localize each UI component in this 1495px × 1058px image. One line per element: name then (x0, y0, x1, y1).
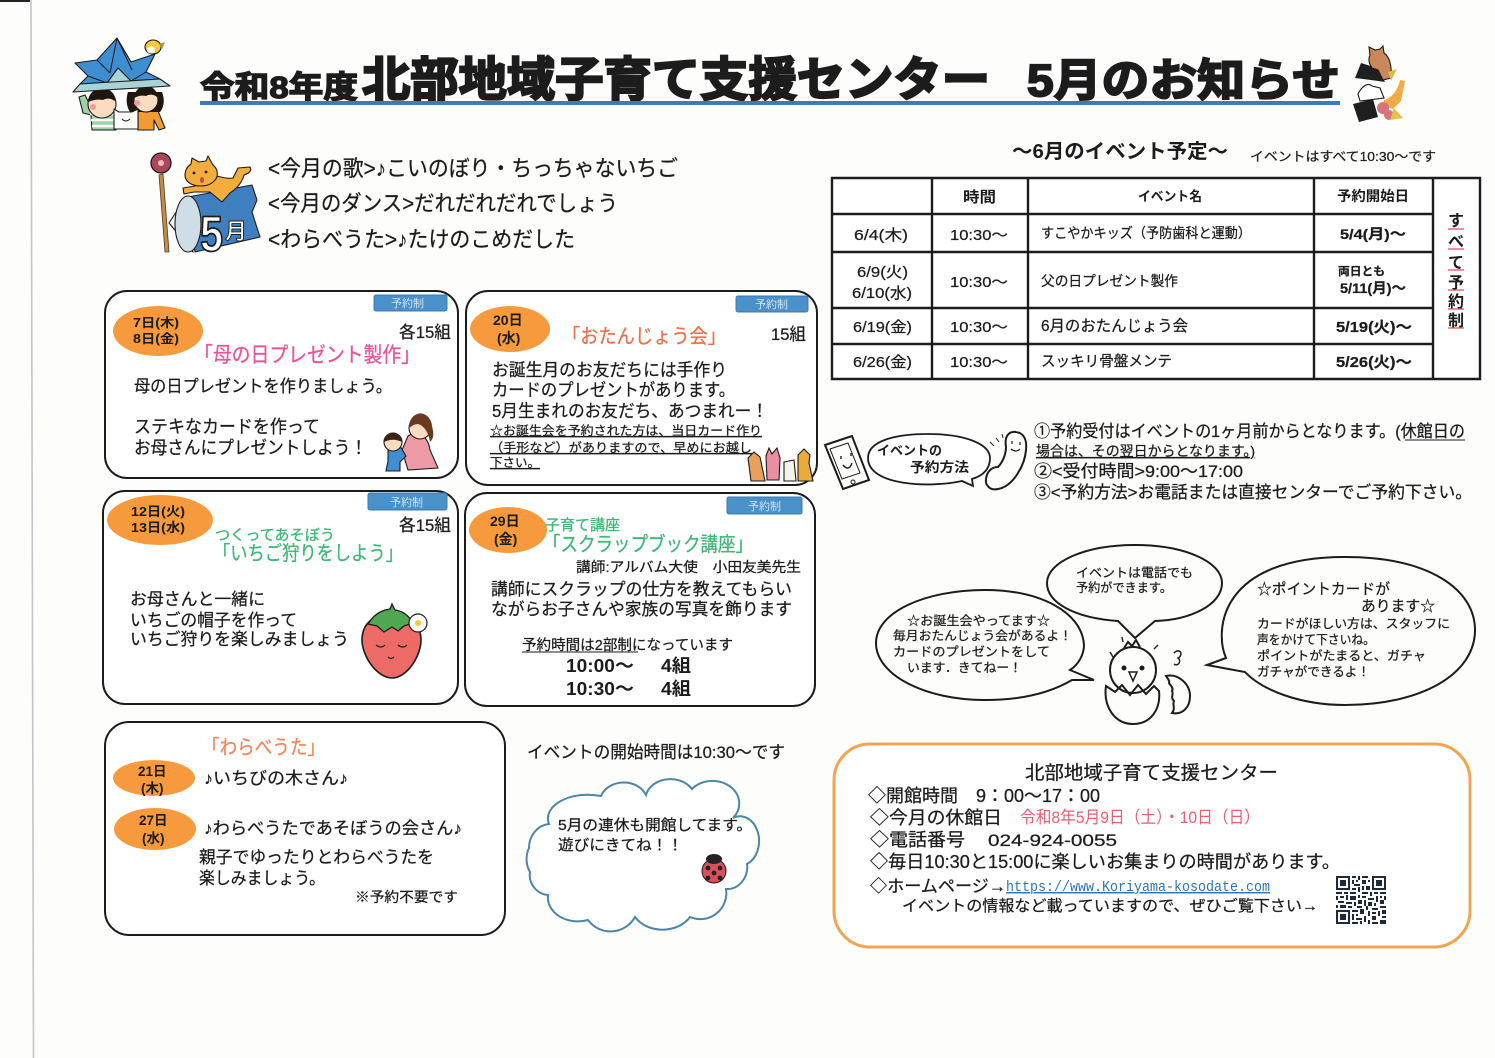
speech bubble: phone reservation: イベントは電話でも (1076, 566, 1193, 580)
body text: 講師にスクラップの仕方を教えてもらい (491, 580, 792, 599)
date oval 27: (水) (142, 831, 164, 846)
body text: カードのプレゼントがあります。 (492, 380, 735, 400)
reservation tag (368, 493, 447, 510)
body text: いちご狩りを楽しみましょう (130, 630, 349, 649)
heading: June events: イベントはすべて10:30～です (1250, 149, 1436, 164)
date oval (470, 306, 550, 352)
date oval (113, 306, 203, 356)
body text: ※予約不要です (355, 889, 458, 905)
reservation tag: 予約制 (748, 499, 781, 513)
speech bubble: point card: ポイントがたまると、ガチャ (1257, 648, 1426, 663)
date oval: 29日 (490, 513, 520, 529)
side label: all reservation: 約 (1448, 293, 1464, 311)
phone number: 024-924-0055 (988, 831, 1117, 850)
date oval 21: 21日 (138, 764, 167, 779)
reservation instructions (1034, 422, 1472, 502)
body text (199, 769, 462, 905)
monthly songs text (268, 156, 678, 252)
speech bubble: birthday: います．きてねー！ (907, 661, 1022, 675)
event title: 「母の日プレゼント製作」 (194, 344, 420, 367)
date oval 21 (113, 760, 195, 796)
body text: ♪わらべうたであそぼうの会さん♪ (204, 819, 462, 838)
cloud callout: 遊びにきてね！！ (558, 837, 683, 854)
date oval: 12日(火) (131, 504, 185, 519)
event title: 「いちご狩りをしよう」 (213, 542, 403, 565)
reservation instructions: ③<予約方法>お電話または直接センターでご予約下さい。 (1034, 483, 1472, 502)
side label: all reservation: べ (1448, 234, 1464, 251)
note (490, 423, 762, 470)
callout: how to reserve: イベントの (877, 443, 942, 458)
row 2: 両日とも (1338, 265, 1385, 278)
reservation times: 4組 (661, 656, 691, 676)
event title: 子育て講座 (545, 517, 620, 534)
reservation tag (727, 497, 802, 514)
icon: carp streamer with cat and 5月: 5 (200, 206, 223, 262)
side label: all reservation: す (1448, 212, 1464, 230)
header row: 予約開始日 (1337, 188, 1409, 204)
reservation tag (736, 296, 808, 312)
instructor: 講師:アルバム大使 小田友美先生 (576, 559, 801, 575)
row 2: 5/11(月)～ (1340, 280, 1406, 296)
reservation tag: 予約制 (390, 495, 423, 509)
date oval: 7日(木) (133, 315, 179, 330)
homepage: ◇ホームページ→ (870, 877, 1006, 896)
reservation times (522, 637, 733, 699)
panel: mother's day: 各15組 (399, 323, 451, 342)
row 4: 5/26(火)～ (1336, 354, 1412, 371)
callout: how to reserve (868, 434, 990, 486)
event title: 「スクラップブック講座」 (543, 532, 753, 556)
speech bubble: phone reservation: 予約ができます。 (1076, 580, 1172, 595)
table grid (832, 178, 1480, 379)
header row: イベント名 (1138, 188, 1202, 204)
panel: scrapbook lecture (465, 493, 815, 706)
row 4: スッキリ骨盤メンテ (1041, 353, 1172, 370)
body text: お母さんにプレゼントしよう！ (134, 438, 367, 458)
icon: ladybug (702, 854, 726, 883)
icon: mother and child (384, 413, 438, 471)
body text: ながらお子さんや家族の写真を飾ります (491, 600, 792, 619)
icon: carp streamer with cat and 5月 (151, 153, 260, 262)
body text: 親子でゆったりとわらべうたを (199, 848, 434, 867)
reservation times: 予約時間は2部制になっています (522, 637, 733, 654)
body text: お誕生月のお友だちには手作り (492, 360, 727, 380)
row 3: 6/19(金) (853, 319, 912, 336)
monthly songs text: <今月のダンス>だれだれだれでしょう (268, 191, 618, 216)
header row (963, 188, 1409, 206)
row 2: 10:30～ (950, 274, 1008, 291)
row 2: 6/9(火) (857, 264, 908, 281)
event title: 「わらべうた」 (202, 736, 325, 759)
heading: June events (1012, 140, 1436, 164)
body text: 5月生まれのお友だち、あつまれー！ (492, 401, 768, 421)
row 4 (853, 353, 1412, 371)
row 1: すこやかキッズ（予防歯科と運動） (1041, 225, 1251, 241)
title: 北部地域子育て支援センター (362, 53, 990, 106)
panel: birthday party (466, 291, 817, 485)
row 3: 6月のおたんじょう会 (1041, 317, 1188, 335)
note: ☆お誕生会を予約された方は、当日カード作り (490, 423, 762, 438)
icon: smartphone (825, 436, 869, 489)
row 1: 10:30～ (950, 227, 1008, 244)
event title: つくってあそぼう (215, 527, 335, 544)
icon: hatching chick (1106, 637, 1190, 724)
daily gathering: ◇毎日10:30と15:00に楽しいお集まりの時間があります。 (870, 852, 1340, 872)
body text: ステキなカードを作って (134, 417, 320, 437)
callout: how to reserve: 予約方法 (910, 459, 970, 475)
cloud callout (527, 779, 759, 931)
closed days: 令和8年5月9日（土）・10日（日） (1020, 808, 1260, 827)
date oval 21: (木) (141, 780, 164, 796)
date oval (107, 495, 213, 545)
title: 令和8年度 (200, 70, 358, 105)
phone number: ◇電話番号 (870, 830, 965, 850)
panel: birthday party: 15組 (771, 325, 806, 344)
heading: June events: ～6月のイベント予定～ (1012, 140, 1228, 163)
monthly songs text: <わらべうた>♪たけのこめだした (268, 227, 575, 252)
row 3: 5/19(火)～ (1336, 319, 1412, 336)
panel: center info (834, 744, 1470, 947)
icon: animals (748, 448, 813, 481)
closed days: ◇今月の休館日 (870, 808, 1002, 828)
opening hours: ◇開館時間 9：00～17：00 (868, 786, 1100, 806)
QR code (1336, 876, 1386, 924)
date oval: (金) (494, 531, 517, 547)
date oval 27: 27日 (139, 813, 168, 828)
speech bubble: point card (1207, 557, 1475, 705)
row 1 (854, 225, 1406, 244)
speech bubble: birthday (876, 590, 1094, 700)
panel: strawberry picking: 各15組 (399, 516, 451, 535)
title: 5月のお知らせ (1027, 55, 1340, 106)
start time note: イベントの開始時間は10:30～です (527, 743, 785, 762)
row 2: 父の日プレゼント製作 (1041, 273, 1178, 289)
speech bubble: point card: ガチャができるよ！ (1257, 664, 1370, 679)
reservation instructions: 場合は、その翌日からとなります。) (1036, 443, 1255, 459)
speech bubble: phone reservation (1047, 545, 1222, 638)
note: 下さい。 (490, 456, 540, 470)
date oval: (水) (497, 330, 520, 346)
speech bubble: birthday: カードのプレゼントをして (893, 645, 1050, 659)
panel: mother's day (105, 291, 458, 478)
date oval (469, 507, 547, 553)
reservation instructions: ②<受付時間>9:00～17:00 (1034, 462, 1243, 481)
reservation tag (374, 295, 447, 311)
event title (543, 517, 753, 556)
side label: all reservation: 制 (1448, 312, 1464, 330)
title (200, 53, 1340, 106)
closed days (870, 808, 1260, 828)
speech bubble: point card: カードがほしい方は、スタッフに (1257, 616, 1450, 631)
side label: all reservation: 予 (1448, 274, 1464, 292)
center name: 北部地域子育て支援センター (1025, 762, 1278, 784)
body text (491, 580, 792, 619)
side label: all reservation (1448, 212, 1464, 330)
panel: warabeuta (105, 722, 505, 935)
date oval: 13日(水) (131, 520, 185, 535)
side label: all reservation: て (1448, 255, 1464, 272)
body text: いちごの帽子を作って (130, 611, 297, 630)
reservation tag: 予約制 (391, 296, 424, 310)
body text: 母の日プレゼントを作りましょう。 (134, 377, 392, 396)
date oval: 20日 (493, 312, 523, 328)
body text: お母さんと一緒に (130, 590, 265, 609)
speech bubble: point card: あります☆ (1361, 598, 1435, 615)
row 1: 5/4(月)～ (1340, 226, 1406, 242)
body text: ♪いちびの木さん♪ (204, 769, 348, 788)
phone number (870, 830, 1117, 850)
row 3 (853, 317, 1412, 336)
icon: strawberry (362, 604, 427, 678)
header row: 時間 (963, 189, 996, 206)
row 1: 6/4(木) (854, 227, 908, 244)
speech bubble: point card: ☆ポイントカードが (1257, 581, 1390, 598)
homepage: https://www.Koriyama-kosodate.com (1006, 880, 1270, 896)
row 3: 10:30～ (950, 319, 1008, 336)
body text: 楽しみましょう。 (199, 869, 325, 888)
row 2 (852, 264, 1406, 302)
speech bubble: birthday: 毎月おたんじょう会があるよ！ (893, 628, 1072, 643)
speech bubble: point card: 声をかけて下さいね。 (1257, 633, 1375, 647)
cloud callout: 5月の連休も開館してます。 (558, 817, 752, 834)
reservation times: 10:00～ (566, 656, 634, 676)
event title (213, 527, 403, 565)
row 4: 10:30～ (950, 354, 1008, 371)
monthly songs text: <今月の歌>♪こいのぼり・ちっちゃないちご (268, 156, 678, 181)
body text (134, 377, 392, 458)
panel: center info: イベントの情報など載っていますので、ぜひご覧下さい→ (902, 897, 1318, 915)
table: June events (832, 178, 1480, 379)
homepage (870, 877, 1270, 896)
reservation instructions: ①予約受付はイベントの1ヶ月前からとなります。(休館日の (1034, 422, 1465, 441)
body text (492, 360, 768, 421)
body text (130, 590, 349, 649)
reservation times: 4組 (661, 679, 691, 699)
reservation tag: 予約制 (755, 297, 788, 311)
note: （手形など）がありますので、早めにお越し (490, 440, 752, 455)
icon: telephone handset (986, 432, 1026, 489)
reservation times: 10:30～ (566, 679, 634, 699)
row 2: 6/10(水) (852, 285, 912, 302)
event title: 「おたんじょう会」 (562, 325, 726, 348)
row 4: 6/26(金) (853, 354, 912, 371)
panel: strawberry picking (103, 491, 458, 704)
icon: kabuto helmet with children (73, 38, 170, 130)
icon: cats on bags (1353, 46, 1405, 122)
speech bubble: birthday: ☆お誕生会やってます☆ (907, 614, 1051, 628)
date oval: 8日(金) (133, 331, 179, 346)
date oval 27 (114, 808, 196, 850)
icon: carp streamer with cat and 5月: 月 (225, 219, 247, 244)
